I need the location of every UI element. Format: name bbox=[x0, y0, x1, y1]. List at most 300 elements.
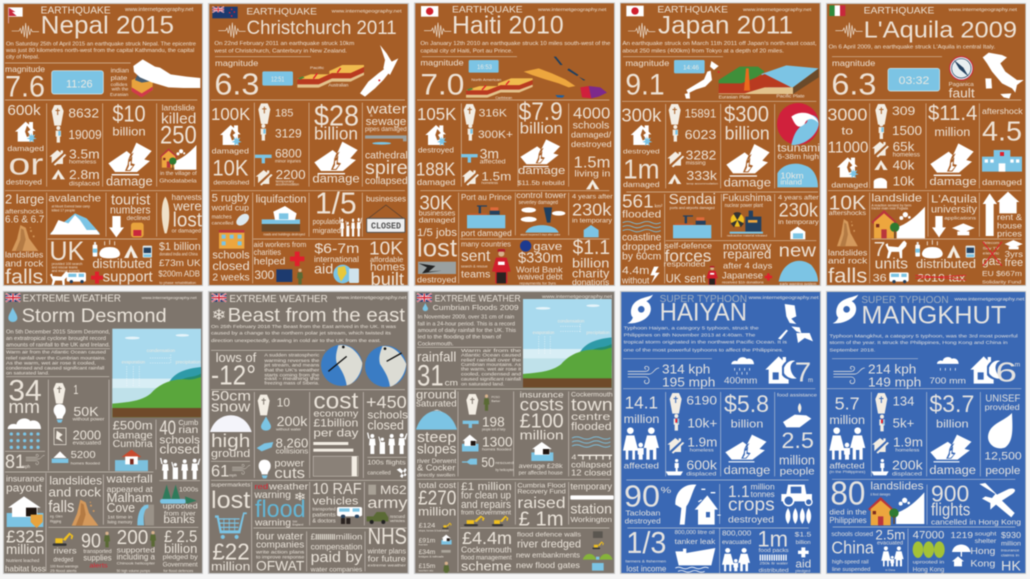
stat: weather warnings: SW bbox=[292, 519, 297, 523]
stat: casualties: 300K+ bbox=[478, 129, 513, 141]
stat: aftershocks: falls bbox=[5, 266, 43, 288]
stat: damage cost: billion bbox=[314, 123, 358, 143]
stat: landslides: & flood damages bbox=[870, 492, 891, 496]
stat: aftershock and hospital: damaged bbox=[982, 177, 1022, 187]
explanation text: Warm air from the Atlantic Ocean caused bbox=[6, 350, 107, 355]
stat: flights cancelled bbox=[931, 480, 1021, 527]
stat: insurance costs: million bbox=[520, 428, 564, 443]
stat: casualties: 600k bbox=[686, 458, 717, 473]
icon: cyclone bbox=[627, 295, 653, 323]
stat: magnitude: magnitude bbox=[832, 58, 876, 68]
stat: World Bank: waived debt bbox=[517, 272, 563, 281]
stat: RAF vehicles bbox=[312, 481, 362, 525]
stat: casualties: affected bbox=[480, 159, 506, 165]
stat: water and cathedral bbox=[365, 100, 408, 187]
intro text: about 250 miles (400km) from Tokyo at a depth of 20 miles. bbox=[622, 48, 784, 54]
icon: seismograph bbox=[12, 23, 39, 38]
stat: houses: 3000 bbox=[827, 105, 867, 125]
stat: rainfall: 34 bbox=[8, 375, 42, 408]
stat: gas bills and free education bbox=[982, 240, 1024, 285]
heading: Haiti 2010: Haiti 2010 bbox=[452, 12, 564, 39]
stat: Fukushima: nuclear power plant bbox=[725, 203, 764, 209]
stat: aid workers bbox=[254, 240, 306, 284]
stat: cost to economy: cost bbox=[313, 388, 359, 414]
stat: control tower: severley damaged bbox=[519, 200, 558, 206]
stat: tsunami: 6-38m high bbox=[777, 152, 819, 161]
stat: charity donations: charity bbox=[572, 266, 609, 280]
stat: landslide: landslide bbox=[871, 193, 922, 205]
stat: weather warnings bbox=[253, 481, 308, 527]
icon: digital clock: 03:32 bbox=[899, 75, 929, 87]
stat: aid workers: aid workers from bbox=[254, 240, 306, 249]
stat: casualties: 5200 bbox=[71, 450, 96, 461]
heading: L'Aquila 2009: www.internetgeography.net bbox=[949, 7, 1018, 12]
stat: casualties and outages: 8,260 bbox=[276, 435, 308, 450]
stat: casualties: 50 bbox=[481, 454, 495, 470]
stat: food packs: food packs bbox=[759, 548, 789, 554]
stat: casualties: 40k bbox=[893, 158, 915, 172]
stat: rainfall: 700 mm bbox=[929, 376, 966, 386]
stat: snow bbox=[210, 388, 252, 480]
stat: rescue teams: teams bbox=[461, 269, 490, 280]
stat: schools closed bbox=[159, 418, 200, 479]
stat: waterfall: Malham bbox=[107, 491, 153, 505]
heading: Beast from the east bbox=[212, 294, 408, 326]
stat: insurance costs bbox=[519, 389, 564, 477]
stat: recovery fund: raised bbox=[517, 495, 566, 512]
stat: flooded coastline: without bbox=[621, 275, 650, 285]
stat: landslide killed 250: Ghodatabela bbox=[159, 179, 198, 185]
stat: food packs: distributed bbox=[759, 568, 789, 574]
stat: casualties and outages: power bbox=[274, 458, 305, 469]
text: stratospheric warming: jet stream, and means bbox=[263, 363, 319, 368]
stat: RAF vehicles: transported bbox=[312, 507, 336, 512]
heading: Japan 2011: www.internetgeography.net bbox=[743, 7, 812, 12]
stat: evacuated: evacuated bbox=[877, 541, 903, 547]
chart: plate boundary diagram: Pacific bbox=[310, 65, 324, 70]
diagram: relief rainfall: evaporation bbox=[533, 330, 555, 335]
stat: landslides: and rock bbox=[48, 485, 102, 499]
stat: harvests lost: were bbox=[172, 200, 202, 214]
stat: government clean up bbox=[461, 481, 512, 526]
stat: schools closed: schools bbox=[159, 435, 200, 447]
icon: compass and fault: fault bbox=[949, 87, 975, 101]
stat: food assistance: million bbox=[779, 454, 815, 468]
stat: sought shelter: shelter bbox=[975, 538, 997, 545]
stat: army supplies bbox=[81, 529, 112, 569]
stat: food assistance: 2.5 bbox=[781, 428, 814, 453]
stat: casualties bbox=[667, 104, 718, 186]
stat: died in Philippines: 80 bbox=[830, 476, 865, 513]
stat: affected: 14.1 bbox=[625, 393, 658, 413]
stat: casualties: rescued bbox=[495, 460, 514, 465]
heading: Mangkhut: www.internetgeography.net bbox=[954, 297, 1025, 302]
stat: government clean up: for clean up bbox=[461, 491, 511, 502]
stat: saturated ground: saturated bbox=[416, 399, 457, 409]
stat: casualties: 65k bbox=[893, 139, 915, 154]
stat: avalanche bbox=[48, 194, 102, 235]
stat: affected: 5.7 bbox=[835, 394, 860, 414]
stat: schools closed: Cumb bbox=[178, 418, 198, 427]
stat: Sendai bbox=[669, 192, 716, 238]
stat: flooded coastline: 561 bbox=[622, 191, 654, 211]
stat: rent and house prices bbox=[983, 192, 1023, 238]
stat: flooded coastline: km² bbox=[655, 203, 663, 208]
stat: casualties: accommodation bbox=[276, 182, 299, 186]
intro text: Cockermouth. bbox=[418, 341, 454, 347]
stat: casualties and outages: 10 bbox=[277, 395, 290, 409]
stat: houses: destroyed bbox=[623, 149, 660, 156]
stat: rugby and schools: closed bbox=[212, 259, 250, 273]
heading: Beast from the east: EXTREME WEATHER bbox=[229, 294, 328, 305]
stat: sought shelter: 1219 bbox=[950, 530, 973, 540]
heading: Haiti 2010: EARTHQUAKE bbox=[452, 5, 523, 15]
stat: rainfall bbox=[929, 357, 966, 386]
stat: liquifaction: liquifaction bbox=[256, 194, 306, 206]
stat: insurance payout: £325 bbox=[6, 526, 44, 546]
heading: Haiyan: SUPER TYPHOON bbox=[660, 294, 747, 305]
stat: snow: mph bbox=[229, 472, 237, 477]
stat: evacuated: evacuated bbox=[722, 540, 751, 546]
stat: RAF vehicles: & doctors bbox=[312, 519, 336, 525]
flag: UK bbox=[212, 294, 226, 302]
stat: houses: damaged bbox=[212, 146, 249, 155]
stat: compensation: paid by bbox=[311, 550, 363, 566]
panel: Super Typhoon Haiyan bbox=[620, 291, 821, 574]
stat: damage cost bbox=[929, 391, 976, 477]
explanation text: condensed and caused significant rainfall bbox=[6, 366, 104, 371]
stat: sought shelter bbox=[950, 530, 997, 569]
stat: affected bbox=[829, 394, 865, 474]
stat: flooded coastline: 4.4m bbox=[622, 265, 649, 277]
flag bbox=[421, 6, 438, 17]
stat: flooded coastline: dropped bbox=[622, 242, 661, 253]
stat: damage cost bbox=[312, 101, 360, 186]
text: stratospheric warming: starts coming from the bbox=[264, 372, 320, 377]
stat: aid pledged bbox=[795, 531, 812, 573]
panel: Japan earthquake 2011 bbox=[620, 2, 820, 286]
stat: damage cost bbox=[928, 101, 977, 188]
stat: total cost bbox=[418, 480, 457, 577]
stat: schools closed: closed bbox=[159, 443, 200, 457]
stat: lost income: farmers & fishermen bbox=[625, 560, 666, 564]
stat: gas bills and free education: 3yrs bbox=[1005, 249, 1024, 259]
stat: UNICEF provided water: people bbox=[985, 465, 1020, 477]
stat: casualties: 10k+ bbox=[687, 416, 717, 430]
stat: army support: 200 bbox=[117, 526, 148, 549]
stat: cost to Cumbria: Cumbria bbox=[113, 439, 153, 450]
chart: subduction diagram bbox=[719, 65, 819, 99]
stat: affordable homes: 10K bbox=[369, 238, 404, 259]
stat: trees uprooted: 1000s bbox=[179, 488, 198, 494]
stat: affected: affected bbox=[829, 460, 865, 470]
stat: schools and displaced bbox=[571, 105, 612, 189]
list: flood measures: new embankments bbox=[516, 550, 580, 559]
stat: damage cost: damage bbox=[106, 174, 153, 188]
stat: UNICEF provided water bbox=[984, 393, 1022, 477]
stat: damage cost: billion bbox=[936, 418, 969, 430]
stat: casualties and outages: cuts bbox=[274, 466, 305, 482]
icon: compass and fault bbox=[949, 57, 975, 101]
stat: supermarkets lost: £22 bbox=[212, 539, 250, 565]
stat: rainfall: 31 bbox=[417, 360, 444, 393]
stat: wind speed: 195 mph bbox=[662, 375, 715, 389]
stat: rescue teams bbox=[461, 242, 512, 283]
stat: magnitude: magnitude bbox=[420, 58, 464, 68]
stat: NHS winter plans: extreme weather bbox=[368, 562, 407, 567]
stat: gas bills and free education: electric bbox=[983, 252, 1000, 256]
stat: evacuated bbox=[875, 527, 905, 572]
stat: casualties: without power bbox=[73, 417, 105, 422]
stat: affordable homes: homes bbox=[370, 262, 405, 274]
stat: trees uprooted: uprooted bbox=[163, 502, 198, 511]
stat: Ofwat action plans: OFWAT bbox=[256, 558, 305, 574]
stat: houses damaged: or bbox=[8, 147, 43, 181]
stat: international aid: international bbox=[314, 255, 359, 264]
stat: World Bank: repayments for 5yrs bbox=[519, 281, 556, 285]
icon: digital clock bbox=[469, 60, 499, 73]
stat: saturated ground: river Derwent bbox=[417, 459, 457, 465]
intro text: amount of daily rainfall for the UK. This bbox=[418, 328, 517, 334]
stat: casualties: 1.5m bbox=[481, 169, 511, 183]
text: stratospheric warming: freezing mass of Siberia. bbox=[264, 381, 319, 386]
stat: water and cathedral: collapsed bbox=[365, 176, 408, 187]
intro text: city of Nepal. bbox=[6, 54, 40, 60]
stat: motorway: motorway bbox=[723, 242, 771, 253]
stat: town centre flooded: 4 bbox=[571, 453, 576, 462]
text: relief rainfall bbox=[461, 348, 522, 387]
stat: supermarkets lost: lost bbox=[211, 487, 251, 514]
stat: World Bank: gave bbox=[533, 241, 562, 253]
stat: water and cathedral: water bbox=[365, 100, 407, 116]
stat: damage cost: $28 bbox=[314, 101, 359, 133]
stat: casualties: 15891 bbox=[685, 106, 717, 120]
stat: landslides: eg. Glen bbox=[50, 514, 63, 518]
stat: sought shelter: Hong bbox=[970, 546, 995, 556]
stat: government pledge: for flood defences bbox=[163, 569, 193, 573]
stat: aid pledged: $1.5 bbox=[795, 531, 812, 538]
stat: schools and flights: cancelled bbox=[367, 471, 391, 477]
stat: casualties bbox=[462, 394, 514, 472]
stat: damage cost: damage bbox=[724, 463, 771, 477]
stat: insurance claims: HK bbox=[1001, 558, 1022, 574]
intro text bbox=[5, 41, 196, 60]
stat: trees uprooted: Hong Kong bbox=[913, 566, 945, 573]
explanation text bbox=[6, 350, 107, 376]
stat: tourist numbers: tourist bbox=[111, 192, 150, 208]
stat: houses: 188K bbox=[416, 160, 455, 180]
stat: weather warnings: warning bbox=[253, 490, 291, 501]
stat: aftershocks and rockfalls: falls bbox=[828, 265, 867, 288]
stat: trees uprooted: uprooted in bbox=[913, 560, 945, 566]
stat: motorway: Japanese bbox=[722, 271, 763, 281]
stat: jobs lost: businesses bbox=[419, 210, 456, 217]
stat: casualties bbox=[461, 104, 513, 186]
stat: cost to economy bbox=[313, 388, 359, 476]
stat: rescue units: 36 bbox=[873, 273, 887, 285]
stat: waterfall bbox=[106, 473, 154, 525]
stat: aid pledged: aid bbox=[795, 558, 811, 570]
stat: crops destroyed: million bbox=[751, 483, 775, 492]
stat: aftershocks: aftershocks bbox=[5, 208, 44, 215]
stat: total cost: tourism etc bbox=[419, 568, 434, 572]
stat: damage cost: $11.4 bbox=[928, 101, 977, 125]
intro text: Typhoon Mangkhut, a category 5 typhoon, was the 3rd most powerful bbox=[829, 333, 1018, 339]
diagram: relief rainfall: condensation bbox=[147, 348, 176, 353]
stat: town centre flooded: town bbox=[571, 395, 613, 415]
stat: temporary station: Workington bbox=[570, 515, 612, 524]
stat: lost income: lost income bbox=[626, 564, 667, 573]
stat: magnitude: 6.3 bbox=[831, 67, 876, 101]
stat: casualties: evacuated bbox=[73, 441, 101, 447]
stat: rugby and schools: 5 rugby bbox=[212, 193, 250, 205]
stat: NHS winter plans: winter plans bbox=[367, 546, 406, 555]
stat: casualties: 5k+ bbox=[893, 416, 914, 430]
sign: businesses closed bbox=[366, 194, 406, 232]
stat: temporary station: station bbox=[570, 500, 612, 516]
stat: snow: ground bbox=[211, 448, 250, 460]
stat: tanker leak: tanker leak bbox=[675, 537, 716, 546]
stat: aid pledged: pledged bbox=[795, 569, 811, 573]
stat: temporary station bbox=[570, 482, 614, 524]
stat: damage cost: damage bbox=[312, 172, 360, 186]
stat: self-defence forces bbox=[664, 241, 718, 286]
stat: insurance payout: habitat loss bbox=[5, 563, 46, 573]
stat: Ofwat action plans: companies bbox=[256, 539, 305, 549]
stat: recovery fund: £ 1m bbox=[519, 507, 564, 530]
stat: World Bank: $330m bbox=[518, 251, 563, 267]
heading: L'Aquila 2009: L'Aquila 2009 bbox=[864, 16, 1017, 42]
stat: aftershocks and rockfalls bbox=[828, 191, 868, 288]
stat: army supplies: supplies bbox=[83, 552, 112, 562]
heading: Cumbrian Floods: Cumbrian Floods 2009 bbox=[433, 303, 519, 312]
stat: total cost: £34m bbox=[419, 549, 436, 556]
stat: recovery fund: Cumbria Flood bbox=[517, 483, 566, 490]
stat: M62 army: vehicles bbox=[390, 518, 405, 523]
stat: casualties: 1.9m bbox=[893, 436, 923, 450]
stat: affected: (in the Philippines) bbox=[829, 470, 865, 474]
stat: cost to Cumbria bbox=[113, 418, 153, 471]
panel: Christchurch earthquake 2011 bbox=[208, 3, 408, 289]
stat: casualties: 6023 bbox=[685, 127, 716, 142]
stat: rescue units bbox=[873, 238, 909, 285]
intro text: amounts of rainfall to the UK and Ireland. bbox=[6, 343, 110, 349]
stat: trees uprooted: 47000 bbox=[913, 530, 944, 542]
stat: casualties: 3282 bbox=[686, 148, 716, 162]
stat: casualties and outages: without water bbox=[276, 428, 302, 432]
text: stratospheric warming: that the UK's weather bbox=[264, 368, 320, 373]
stat: aftershock and hospital: 4.5 bbox=[982, 116, 1022, 147]
intro text: On 22nd February 2011 an earthquake struck 10km bbox=[214, 41, 355, 47]
stat: landslides: landslides bbox=[49, 474, 102, 488]
stat: motorway: received $1b donations bbox=[722, 280, 764, 284]
stat: saturated ground: directly swollen bbox=[417, 473, 456, 478]
heading: Nepal 2015: www.internetgeography.net bbox=[125, 7, 194, 13]
stat: international aid bbox=[314, 240, 359, 283]
stat: trees uprooted: from river bbox=[164, 510, 197, 517]
stat: casualties: 1.9m bbox=[687, 436, 717, 450]
stat: lows of -12 bbox=[211, 350, 257, 391]
stat: university: L'Aquila bbox=[931, 194, 977, 206]
stat: international aid: to phase rehabilitation bbox=[159, 280, 196, 285]
stat: international aid bbox=[158, 241, 201, 285]
stat: affected: million bbox=[829, 413, 865, 427]
icon: compass and fault: Paganica bbox=[949, 82, 975, 88]
chart: plate boundary diagram bbox=[466, 78, 533, 100]
stat: university: university bbox=[931, 205, 977, 216]
stat: jobs lost: 30K bbox=[419, 191, 453, 214]
icon: digital clock: 12:51 bbox=[271, 75, 284, 84]
stat: houses damaged: damaged bbox=[7, 144, 44, 153]
stat: magnitude: magnitude bbox=[5, 64, 45, 74]
stat: university bbox=[931, 194, 977, 237]
stat: evacuated: in China bbox=[885, 568, 896, 572]
stat: rainfall: 81 bbox=[5, 452, 25, 473]
stat: casualties: missing bbox=[686, 161, 706, 167]
stat: rent and house prices: house bbox=[997, 221, 1023, 230]
stat: cost to economy: £1billion bbox=[313, 418, 358, 430]
stat: rescue teams: search & rescue bbox=[461, 263, 488, 268]
stat: charity donations: billion bbox=[572, 256, 609, 270]
stat: houses bbox=[211, 104, 250, 186]
stat: damage cost: damage bbox=[724, 176, 771, 190]
heading: Haiyan: HAIYAN bbox=[660, 299, 747, 326]
stat: magnitude: magnitude bbox=[625, 58, 670, 68]
stat: M62 army: M62 bbox=[380, 483, 407, 497]
stat: NHS winter plans: for future bbox=[368, 553, 406, 563]
stat: casualties: 50K bbox=[73, 404, 99, 419]
stat: flood scheme: £4.4m bbox=[462, 528, 512, 548]
stat: Ofwat action plans: to improve response bbox=[256, 555, 305, 560]
stat: harvests lost: lost bbox=[173, 210, 202, 232]
stat: crops destroyed: destroyed bbox=[728, 515, 774, 525]
stat: casualties: 333k bbox=[686, 169, 718, 183]
stat: houses: demolished bbox=[213, 179, 250, 186]
stat: RAF vehicles: vehicles bbox=[312, 496, 359, 508]
stat: aid pledged: billion bbox=[796, 540, 811, 546]
stat: aftershocks: and rock bbox=[5, 259, 44, 269]
stat: damage cost: billion bbox=[731, 418, 763, 430]
intro text bbox=[624, 326, 788, 352]
stat: total cost: total cost bbox=[419, 480, 457, 490]
explanation text: relief rainfall over the Cumbrian mountains. bbox=[6, 356, 106, 361]
stat: casualties: homeless bbox=[69, 160, 97, 166]
icon: digital clock: 14:46 bbox=[683, 64, 699, 71]
heading: Storm Desmond: www.internetgeography.net bbox=[142, 296, 197, 300]
stat: casualties and outages: 200k bbox=[277, 413, 308, 429]
stat: tanker leak bbox=[675, 530, 716, 572]
list: flood measures: river dredged bbox=[517, 538, 581, 550]
stat: food assistance bbox=[777, 393, 818, 477]
stat: storm surge: 7 bbox=[795, 356, 811, 387]
stat: damage cost: damage bbox=[518, 165, 565, 177]
stat: town centre flooded: centre bbox=[571, 412, 611, 423]
stat: UK support bbox=[49, 236, 86, 286]
stat: total cost: £270 bbox=[418, 487, 456, 510]
heading: Christchurch 2011: EARTHQUAKE bbox=[246, 7, 317, 17]
stat: gas bills and free education: Sky TV bbox=[983, 246, 1000, 250]
stat: rescue teams: many countries bbox=[461, 242, 512, 249]
stat: casualties: temporary bbox=[276, 179, 294, 183]
intro text: led to the flooding of the town of bbox=[418, 335, 502, 341]
stat: aftershocks: 6.6 & 6.7 bbox=[5, 215, 45, 226]
icon: tractor and wheat bbox=[781, 485, 812, 524]
stat: rescue teams: sent bbox=[461, 248, 491, 265]
stat: casualties: 10k bbox=[893, 174, 915, 188]
stat: temporary housing: 4 years after bbox=[778, 195, 820, 202]
stat: total cost: bridges & railroads bbox=[419, 554, 444, 558]
stat: schools and displaced: 4000 bbox=[573, 105, 610, 122]
